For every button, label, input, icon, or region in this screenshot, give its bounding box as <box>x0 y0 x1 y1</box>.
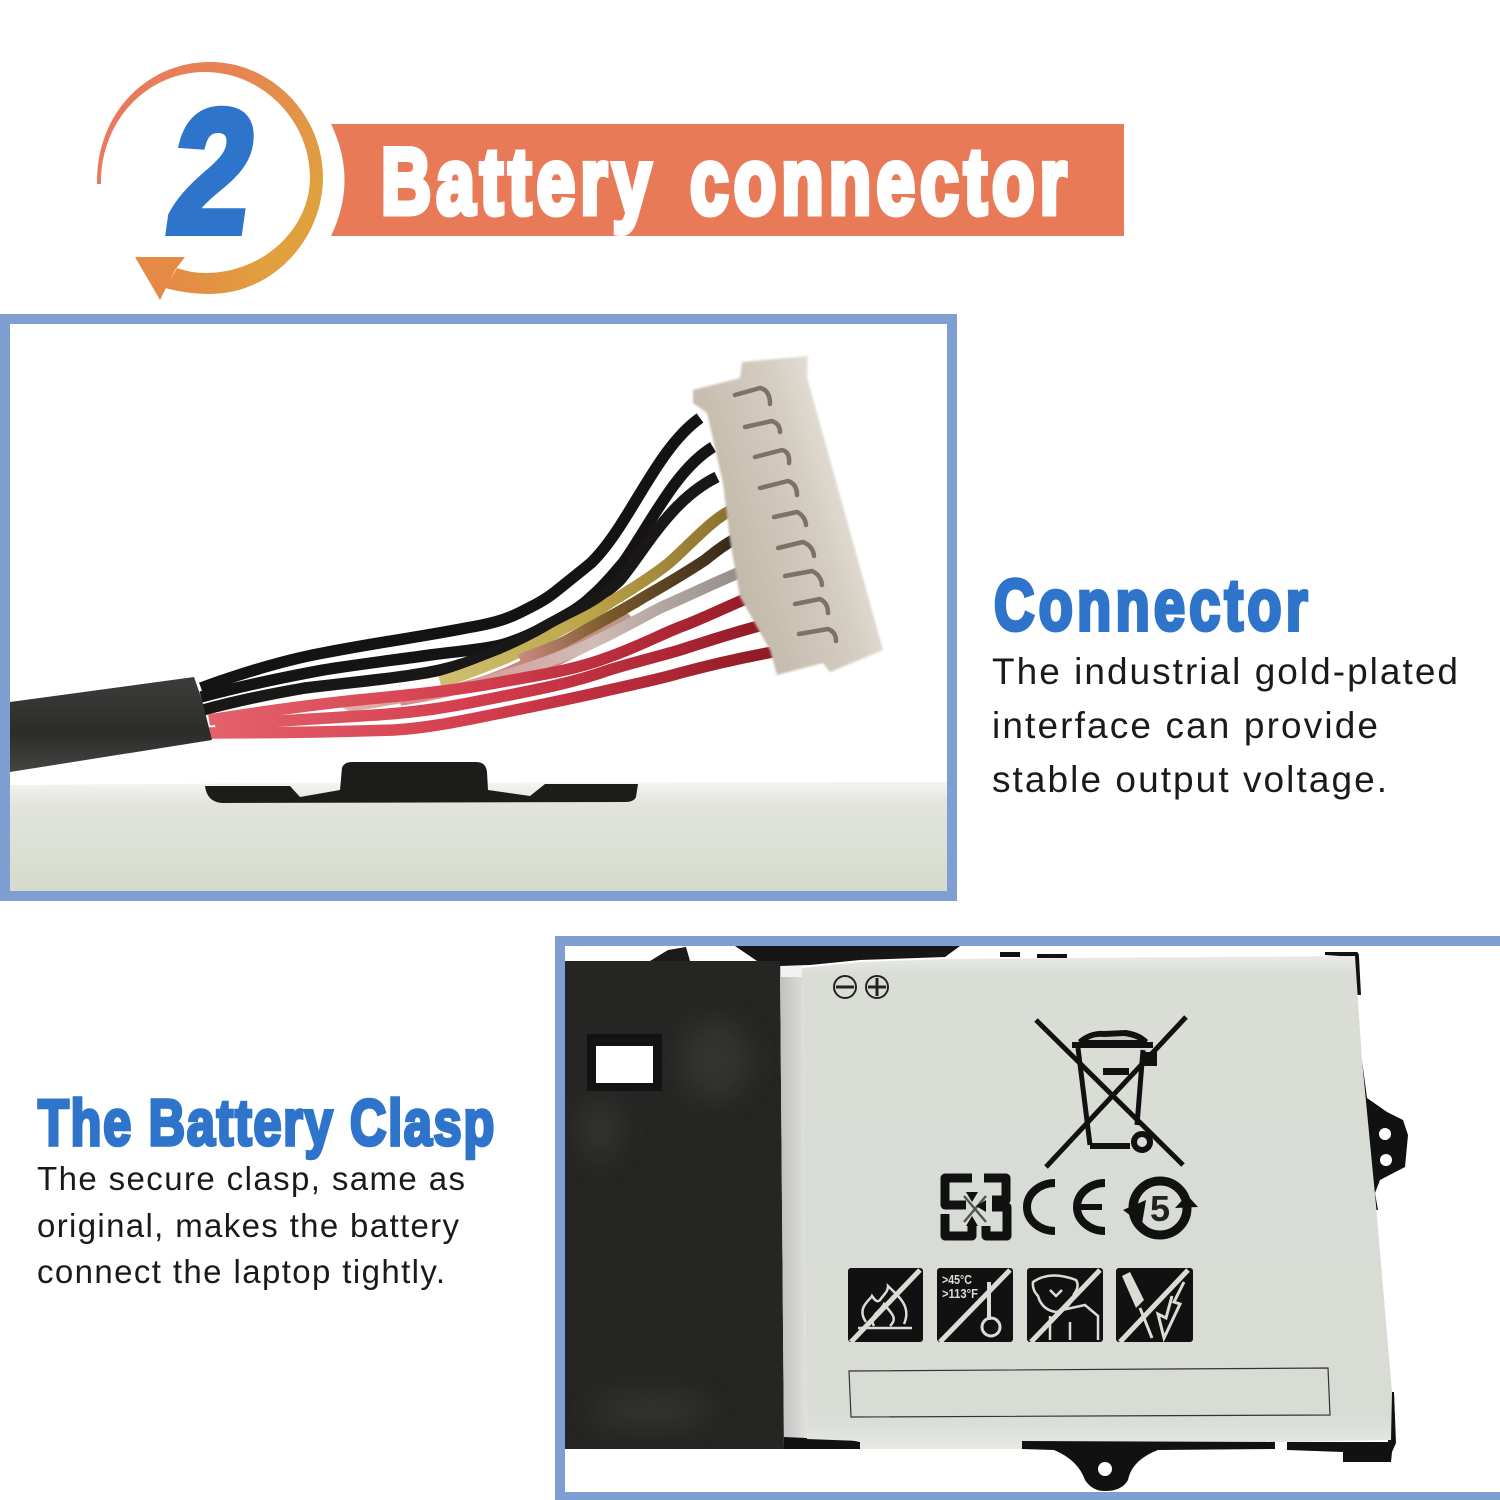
description: stable output voltage. <box>992 759 1387 800</box>
title banner <box>331 124 1124 236</box>
number 2: 2 <box>159 75 267 270</box>
description: connect the laptop tightly. <box>37 1253 445 1290</box>
icon: recycling mark <box>945 1178 1007 1236</box>
title text <box>381 128 1067 234</box>
barcode box <box>849 1368 1330 1417</box>
icon: no fire <box>848 1268 923 1342</box>
icon: no pets <box>1027 1268 1103 1342</box>
title text: Battery <box>381 128 651 234</box>
title text: connector <box>690 128 1067 234</box>
silver battery label <box>802 956 1392 1449</box>
icon: CE mark <box>1027 1183 1105 1231</box>
clasp holes <box>1098 1128 1392 1476</box>
circular arrow <box>97 62 323 300</box>
icon: polarity <box>834 976 888 998</box>
silver strip <box>780 966 807 1443</box>
black clasp on battery edge <box>205 762 638 803</box>
icon: no high temperature: >113°F <box>942 1286 978 1301</box>
text block: battery clasp <box>37 1087 494 1290</box>
panel: battery photo <box>555 936 1500 1500</box>
black battery edges and clasps <box>784 952 1408 1491</box>
description: interface can provide <box>992 705 1378 746</box>
step number badge <box>97 62 323 300</box>
icon: crossed-out bin <box>1036 1017 1186 1167</box>
icon: no tampering <box>1116 1268 1193 1342</box>
icon: no high temperature <box>937 1268 1013 1342</box>
icon: 5-year recycling ring <box>1123 1181 1198 1235</box>
number 5: 5 <box>1150 1188 1170 1229</box>
white surface <box>10 782 947 891</box>
description: original, makes the battery <box>37 1207 460 1244</box>
white wire connector <box>693 356 883 675</box>
black cell wrap <box>565 946 960 1449</box>
cable sleeve <box>10 677 212 772</box>
wire bundle <box>201 418 773 733</box>
icon: no high temperature: >45°C <box>942 1272 972 1287</box>
panel: connector photo <box>0 314 957 901</box>
surface wear <box>580 1020 750 1426</box>
description <box>992 651 1458 800</box>
description <box>37 1160 465 1290</box>
description: The industrial gold-plated <box>992 651 1458 692</box>
text block: connector <box>992 565 1458 800</box>
description: The secure clasp, same as <box>37 1160 465 1197</box>
heading: The Battery Clasp: The Battery Clasp <box>38 1087 494 1159</box>
heading: Connector: Connector <box>994 565 1308 646</box>
square cutout <box>587 1034 662 1091</box>
